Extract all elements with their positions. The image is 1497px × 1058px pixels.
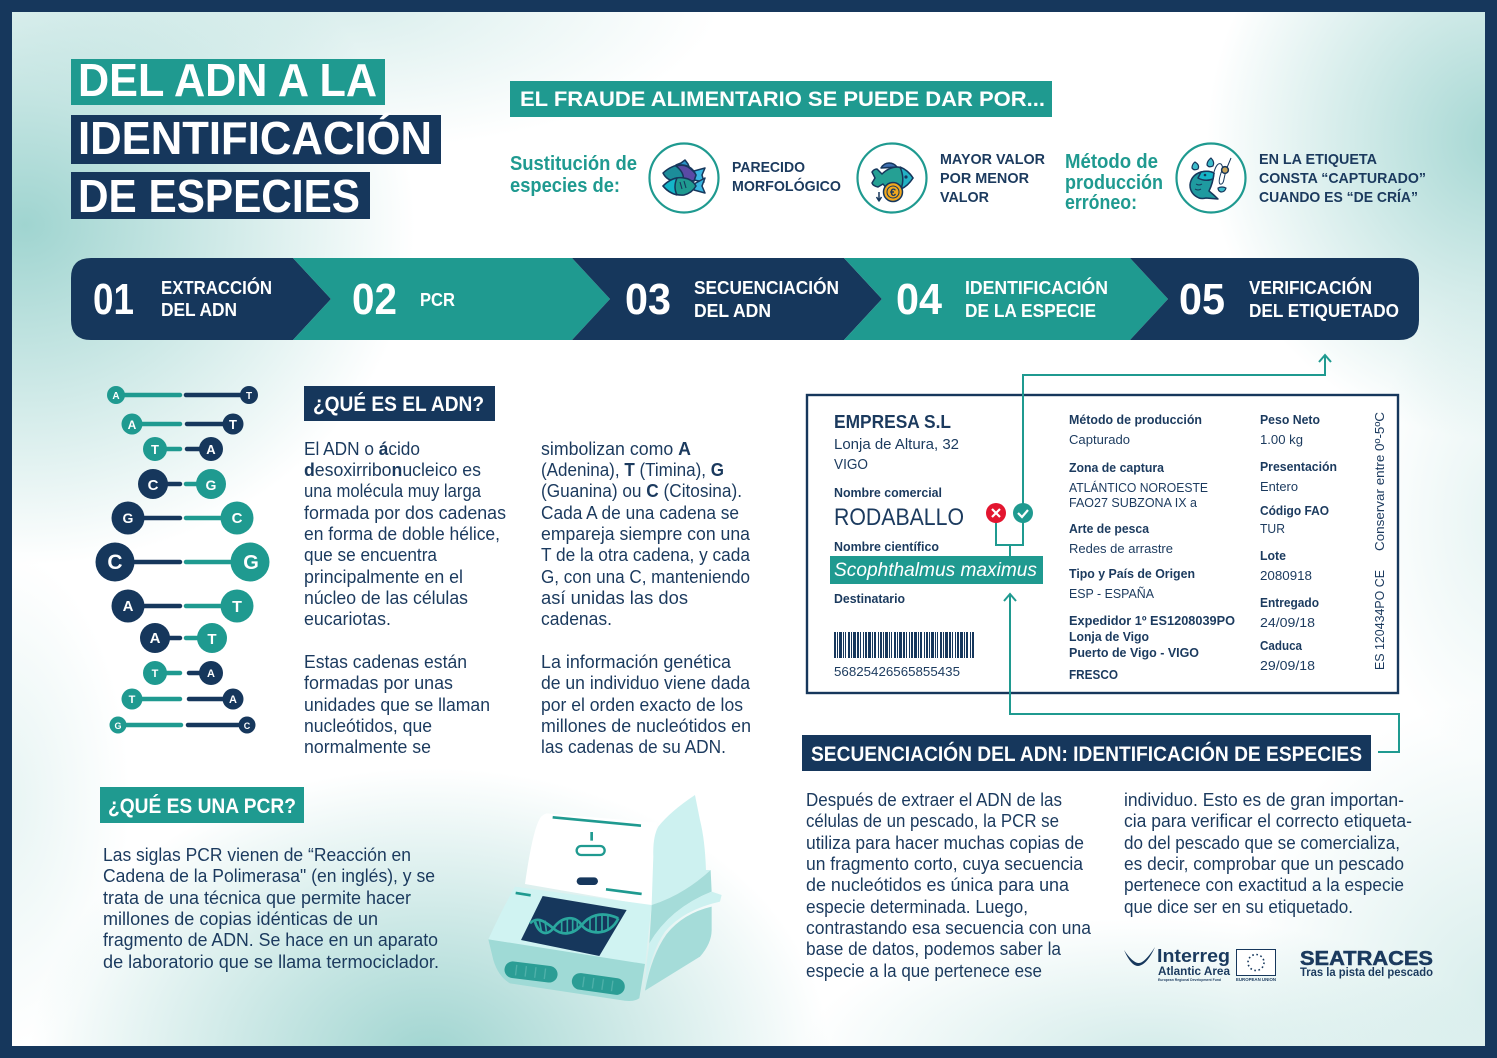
title	[71, 54, 441, 222]
logo: Interreg Atlantic Area	[1124, 946, 1230, 982]
text: sequencing column 1: de nucleótidos es única para una	[806, 875, 1070, 895]
label: company and names	[830, 412, 1043, 606]
text: PCR explanation: Cadena de la Polimerasa" (en inglés), y se	[103, 866, 435, 886]
text: PCR explanation	[103, 845, 439, 972]
text: DNA column 1: que se encuentra	[304, 545, 438, 565]
cause: morphological similarity: MORFOLÓGICO	[732, 177, 841, 195]
heading: DNA sequencing	[802, 735, 1371, 771]
DNA base pair ladder: T	[246, 391, 252, 402]
title: DE ESPECIES	[78, 170, 360, 222]
label: vertical storage text: Conservar entre 0º-5ºC	[1373, 412, 1387, 551]
text: PCR explanation: Las siglas PCR vienen de “Reacción en	[103, 845, 411, 865]
species substitution label: especies de:	[510, 175, 620, 197]
label: production details column: FRESCO	[1069, 668, 1118, 682]
label: company and names: Scophthalmus maximus	[834, 560, 1037, 581]
text: DNA column 1: nucleótidos, que	[304, 716, 432, 736]
cause: morphological similarity	[732, 159, 841, 195]
text: DNA column 1: en forma de doble hélice,	[304, 524, 500, 544]
step 04: DE LA ESPECIE	[965, 300, 1096, 321]
text: DNA column 2	[541, 439, 751, 757]
text: DNA column 1: principalmente en el	[304, 567, 463, 587]
label: weight and dates column: Entregado	[1260, 596, 1319, 610]
step 02: 02	[352, 275, 397, 324]
text: DNA column 2: cadenas.	[541, 609, 612, 629]
label: production details column	[1069, 413, 1235, 682]
text: DNA column 2: las cadenas de su ADN.	[541, 737, 726, 757]
logo: European Union flag: EUROPEAN UNION	[1236, 977, 1276, 982]
text: DNA column 2: simbolizan como A	[541, 439, 691, 459]
label: production details column: ESP - ESPAÑA	[1069, 586, 1154, 601]
cause: morphological similarity: PARECIDO	[732, 159, 805, 176]
DNA base pair ladder: T	[229, 417, 237, 432]
connector arrow: sequencing up to scientific name	[1004, 594, 1399, 752]
step 01: DEL ADN	[161, 299, 237, 320]
cause: higher value for lower value	[940, 151, 1045, 206]
label: weight and dates column: Presentación	[1260, 460, 1337, 474]
DNA base pair ladder	[96, 386, 270, 734]
label: production details column: Lonja de Vigo	[1069, 630, 1149, 644]
text: sequencing column 1: base de datos, podemos saber la	[806, 939, 1062, 959]
step 03	[572, 258, 882, 340]
text: sequencing column 2: individuo. Esto es de gran importan-	[1124, 790, 1404, 810]
step 03: SECUENCIACIÓN	[694, 277, 839, 298]
heading: DNA sequencing: SECUENCIACIÓN DEL ADN: IDENTIFICACIÓN DE ESPECIES	[811, 741, 1362, 766]
DNA base pair ladder: A	[206, 442, 216, 457]
text: DNA column 1	[304, 439, 506, 757]
DNA base pair ladder: T	[232, 599, 242, 616]
logo: Seatraces: Tras la pista del pescado	[1300, 967, 1433, 979]
cause: higher value for lower value: MAYOR VALOR	[940, 151, 1045, 168]
DNA base pair ladder: G	[114, 721, 122, 731]
label: production details column: Zona de captura	[1069, 461, 1165, 475]
text: DNA column 2: de un individuo viene dada	[541, 673, 751, 693]
logo: Interreg Atlantic Area: Interreg	[1157, 946, 1230, 966]
logo: European Union flag	[1236, 950, 1276, 982]
DNA base pair ladder: A	[123, 598, 134, 615]
step 03: DEL ADN	[694, 300, 771, 321]
DNA base pair ladder: T	[151, 442, 159, 457]
DNA base pair ladder: T	[152, 668, 159, 680]
icon: fish with euro coin: €	[890, 187, 896, 199]
heading: what is DNA	[304, 386, 495, 421]
production method label: producción	[1065, 172, 1163, 194]
label: weight and dates column: Código FAO	[1260, 504, 1329, 518]
species substitution label: Sustitución de	[510, 153, 637, 175]
step 05	[1130, 258, 1419, 340]
text: sequencing column 1: un fragmento corto, cuya secuencia	[806, 854, 1084, 874]
text: DNA column 2: empareja siempre con una	[541, 524, 751, 544]
label: company and names: Destinatario	[834, 592, 905, 606]
title: DEL ADN A LA	[78, 54, 377, 106]
label: company and names: RODABALLO	[834, 504, 964, 531]
icon: correct mark	[1013, 503, 1033, 523]
text: sequencing column 1	[806, 790, 1092, 981]
label: production details column: Arte de pesca	[1069, 522, 1150, 536]
logo: Interreg Atlantic Area: European Regional Development Fund	[1158, 977, 1221, 982]
DNA base pair ladder: T	[129, 694, 136, 706]
label: vertical storage text	[1373, 412, 1387, 670]
connector bracket: names to check marks	[996, 512, 1023, 556]
label: weight and dates column: 24/09/18	[1260, 615, 1315, 630]
step 04	[844, 258, 1168, 340]
step 05: VERIFICACIÓN	[1249, 277, 1372, 298]
label: weight and dates column: Lote	[1260, 549, 1286, 563]
heading: food fraud: EL FRAUDE ALIMENTARIO SE PUEDE DAR POR...	[520, 87, 1045, 111]
DNA base pair ladder: A	[128, 418, 137, 432]
label: production details column: Puerto de Vigo - VIGO	[1069, 646, 1199, 660]
label: weight and dates column: Peso Neto	[1260, 413, 1320, 427]
label: company and names: VIGO	[834, 457, 868, 473]
label: weight and dates column: 1.00 kg	[1260, 432, 1303, 447]
text: sequencing column 2: que dice ser en su etiquetado.	[1124, 897, 1353, 917]
text: sequencing column 1: células de un pescado, la PCR se	[806, 811, 1059, 831]
process arrow band	[71, 258, 1419, 340]
DNA base pair ladder: A	[229, 694, 237, 706]
product label	[807, 395, 1398, 693]
text: DNA column 2: G, con una C, manteniendo	[541, 567, 750, 587]
heading: what is a PCR	[100, 787, 304, 823]
step 02	[293, 258, 610, 340]
text: DNA column 1: El ADN o ácido	[304, 439, 420, 459]
text: sequencing column 1: especie a la que pertenece ese	[806, 961, 1042, 981]
DNA base pair ladder: T	[207, 631, 217, 648]
label: company and names: Lonja de Altura, 32	[834, 437, 959, 453]
label: vertical storage text: ES 120434PO CE	[1373, 570, 1387, 670]
species substitution label	[510, 153, 637, 197]
title: IDENTIFICACIÓN	[78, 112, 432, 164]
text: sequencing column 2: cia para verificar el correcto etiqueta-	[1124, 811, 1412, 831]
icon: two similar fish	[650, 144, 718, 212]
DNA base pair ladder: G	[243, 552, 259, 574]
text: sequencing column 1: contrastando esa secuencia con una	[806, 918, 1092, 938]
label: production details column: Capturado	[1069, 432, 1130, 447]
label: weight and dates column	[1260, 413, 1337, 673]
label: company and names: Nombre comercial	[834, 486, 942, 500]
barcode: 56825426565855435	[834, 665, 960, 679]
label: production details column: Expedidor 1º ES1208039PO	[1069, 614, 1235, 628]
text: sequencing column 1: Después de extraer el ADN de las	[806, 790, 1062, 810]
text: DNA column 2: así unidas las dos	[541, 588, 688, 608]
icon: fish with euro coin	[858, 144, 926, 212]
text: sequencing column 1: especie determinada. Luego,	[806, 897, 1028, 917]
text: PCR explanation: fragmento de ADN. Se hace en un aparato	[103, 930, 438, 950]
cause: higher value for lower value: VALOR	[940, 189, 989, 206]
production method label: erróneo:	[1065, 192, 1137, 214]
text: sequencing column 1: utiliza para hacer muchas copias de	[806, 833, 1084, 853]
heading: food fraud	[510, 81, 1052, 117]
label: production details column: FAO27 SUBZONA IX a	[1069, 495, 1198, 510]
cause: label says caught when farmed	[1259, 151, 1426, 206]
icon: wrong mark	[986, 503, 1006, 523]
cause: label says caught when farmed: CONSTA “CAPTURADO”	[1259, 170, 1426, 187]
label: weight and dates column: 2080918	[1260, 568, 1312, 583]
icon: hooked fish jumping	[1176, 144, 1246, 212]
logo: Interreg Atlantic Area: Atlantic Area	[1158, 964, 1230, 978]
step 04: 04	[896, 275, 942, 324]
heading: what is a PCR: ¿QUÉ ES UNA PCR?	[108, 793, 296, 818]
label: production details column: Redes de arrastre	[1069, 541, 1173, 556]
text: DNA column 2: por el orden exacto de los	[541, 695, 743, 715]
production method label	[1065, 151, 1163, 214]
cause: label says caught when farmed: CUANDO ES “DE CRÍA”	[1259, 189, 1418, 206]
text: DNA column 2: La información genética	[541, 652, 732, 672]
DNA base pair ladder: C	[107, 551, 123, 574]
DNA base pair ladder: C	[148, 477, 159, 494]
label: weight and dates column: TUR	[1260, 521, 1285, 536]
step 04: IDENTIFICACIÓN	[965, 277, 1108, 298]
step 01: 01	[93, 275, 134, 324]
logo: Seatraces	[1300, 948, 1433, 979]
text: DNA column 2: millones de nucleótidos en	[541, 716, 751, 736]
text: PCR explanation: trata de una técnica que permite hacer	[103, 888, 411, 908]
text: DNA column 2: T de la otra cadena, y cada	[541, 545, 751, 565]
DNA base pair ladder: G	[123, 510, 134, 526]
text: DNA column 1: formadas por unas	[304, 673, 453, 693]
text: DNA column 1: eucariotas.	[304, 609, 391, 629]
cause: label says caught when farmed: EN LA ETIQUETA	[1259, 151, 1377, 168]
production method label: Método de	[1065, 151, 1158, 173]
text: DNA column 1: formada por dos cadenas	[304, 503, 506, 523]
step 01	[71, 258, 331, 340]
text: DNA column 1: unidades que se llaman	[304, 695, 490, 715]
text: DNA column 2: Cada A de una cadena se	[541, 503, 739, 523]
step 01: EXTRACCIÓN	[161, 277, 272, 298]
DNA base pair ladder: G	[206, 477, 217, 493]
step 02: PCR	[420, 289, 455, 310]
illustration: thermocycler	[488, 795, 722, 1001]
DNA base pair ladder: A	[207, 668, 215, 680]
text: PCR explanation: de laboratorio que se llama termociclador.	[103, 952, 439, 972]
DNA base pair ladder: C	[232, 510, 243, 527]
text: DNA column 2: (Adenina), T (Timina), G	[541, 460, 724, 480]
step 03: 03	[625, 275, 671, 324]
text: PCR explanation: millones de copias idénticas de un	[103, 909, 378, 929]
connector arrow: correct name up to verification	[1023, 355, 1331, 512]
text: DNA column 1: normalmente se	[304, 737, 431, 757]
text: DNA column 2: (Guanina) ou C (Citosina).	[541, 481, 742, 501]
text: sequencing column 2: pertenece con exactitud a la especie	[1124, 875, 1404, 895]
label: company and names: EMPRESA S.L	[834, 412, 951, 432]
text: DNA column 1: núcleo de las células	[304, 588, 468, 608]
text: sequencing column 2: do del pescado que se comercializa,	[1124, 833, 1400, 853]
text: sequencing column 2	[1124, 790, 1412, 917]
label: production details column: Método de producción	[1069, 413, 1202, 427]
label: weight and dates column: 29/09/18	[1260, 658, 1315, 673]
cause: higher value for lower value: POR MENOR	[940, 170, 1029, 187]
text: DNA column 1: Estas cadenas están	[304, 652, 467, 672]
heading: what is DNA: ¿QUÉ ES EL ADN?	[313, 391, 484, 416]
label: production details column: ATLÁNTICO NOROESTE	[1069, 480, 1208, 495]
label: weight and dates column: Entero	[1260, 479, 1298, 494]
text: DNA column 1: desoxirribonucleico es	[304, 460, 481, 480]
DNA base pair ladder: C	[244, 721, 251, 731]
logo: Seatraces: SEATRACES	[1300, 948, 1433, 970]
DNA base pair ladder: A	[150, 630, 161, 647]
text: DNA column 1: una molécula muy larga	[304, 481, 482, 501]
label: weight and dates column: Caduca	[1260, 639, 1303, 653]
label: company and names: Nombre científico	[834, 540, 939, 554]
step 05: DEL ETIQUETADO	[1249, 300, 1399, 321]
label: production details column: Tipo y País de Origen	[1069, 567, 1195, 581]
step 05: 05	[1179, 275, 1225, 324]
DNA base pair ladder: A	[112, 391, 120, 402]
text: sequencing column 2: es decir, comprobar que un pescado	[1124, 854, 1404, 874]
